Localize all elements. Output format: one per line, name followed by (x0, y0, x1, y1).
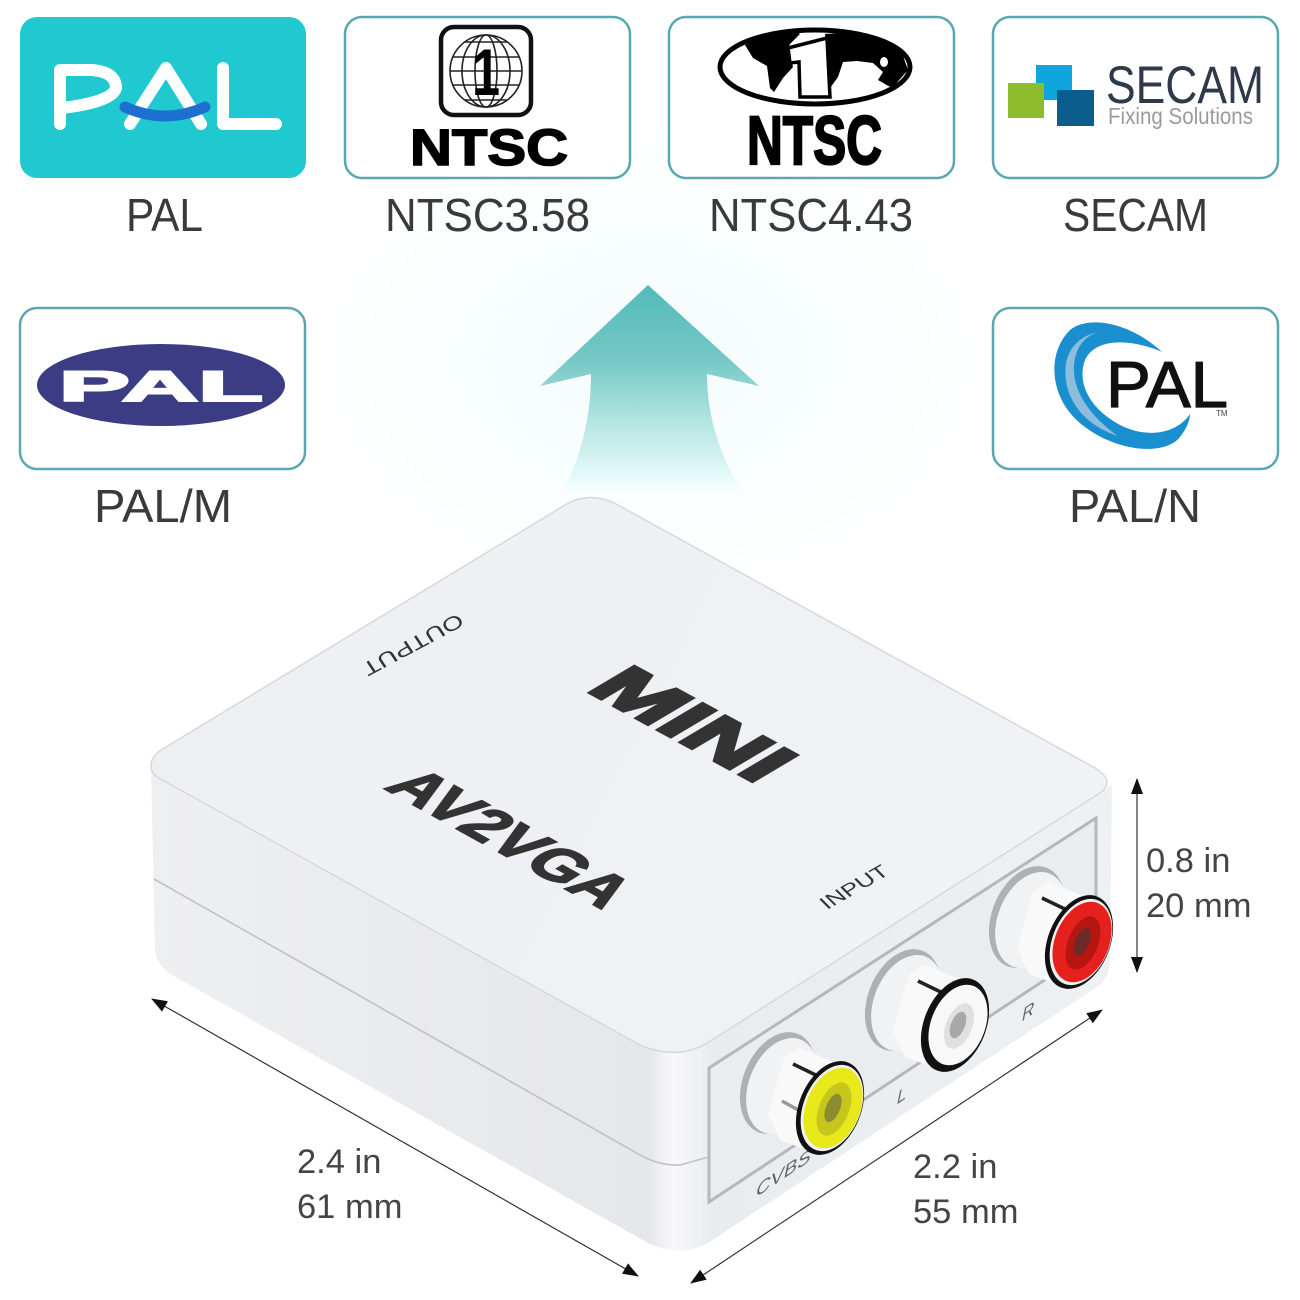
panel: PAL/M (20, 308, 305, 469)
text: NTSC condensed logo: NTSC (747, 102, 882, 179)
dimension text: length: 2.4 in (297, 1143, 381, 1181)
background glow (320, 130, 980, 590)
dimension arrow: width (691, 1010, 1102, 1283)
dimension text: width: 2.2 in (913, 1148, 997, 1186)
label: PAL/N: PAL/N (1069, 480, 1201, 532)
icon: PAL logo (60, 68, 276, 124)
panel: PAL (20, 17, 306, 178)
dimension text: height: 20 mm (1146, 887, 1251, 925)
label: PAL: PAL (126, 189, 203, 241)
text: CVBS: CVBS (754, 1144, 813, 1203)
panel: PAL/N (993, 308, 1278, 469)
dimension text: width (913, 1148, 1018, 1231)
panel: NTSC4.43 (669, 17, 954, 179)
text: Fixing Solutions: Fixing Solutions (1108, 103, 1253, 129)
icon: world ellipse with number 1 (720, 29, 910, 104)
icon: PAL swoosh logo (1054, 322, 1228, 449)
connector: white L (851, 938, 1002, 1082)
label: NTSC3.58: NTSC3.58 (385, 189, 590, 241)
icon: PAL oval logo (37, 344, 285, 426)
panel: NTSC3.58 (345, 17, 630, 178)
icon: globe with number 1 (441, 27, 531, 115)
label: NTSC4.43: NTSC4.43 (709, 189, 913, 241)
label: PAL/M: PAL/M (94, 480, 232, 532)
text: INPUT: INPUT (815, 862, 894, 914)
text: L: L (895, 1082, 909, 1110)
text: MINI: MINI (571, 655, 816, 792)
dimension text: height (1146, 842, 1251, 925)
panel: SECAM (993, 17, 1278, 178)
text: SECAM logo: SECAM (1106, 56, 1264, 115)
text: NTSC logo: NTSC (410, 119, 568, 176)
seam line (154, 879, 709, 1165)
device top face (151, 498, 1107, 1052)
label: SECAM: SECAM (1063, 189, 1208, 241)
dimension text: width: 55 mm (913, 1193, 1018, 1231)
icon: globe with number 1: 1 (472, 35, 500, 109)
connector: red R (975, 855, 1126, 999)
dimension text: length (297, 1143, 402, 1226)
dimension arrow: height (1136, 779, 1138, 972)
icon: PAL oval logo: PAL (59, 363, 263, 411)
device: AV2VGA converter box (151, 498, 1126, 1250)
port panel (709, 818, 1096, 1202)
icon: PAL swoosh logo: PAL (1106, 348, 1228, 421)
icon: SECAM squares (1008, 65, 1094, 126)
device side walls (151, 765, 1112, 1250)
text: R: R (1020, 997, 1036, 1027)
icon: PAL swoosh logo: TM (1216, 409, 1228, 418)
connector: yellow CVBS (726, 1021, 877, 1165)
arrow: upward conversion (540, 285, 759, 497)
text: AV2VGA: AV2VGA (372, 759, 649, 917)
dimension arrow: length (152, 999, 638, 1276)
dimension text: height: 0.8 in (1146, 842, 1230, 880)
dimension text: length: 61 mm (297, 1188, 402, 1226)
text: OUTPUT: OUTPUT (358, 609, 467, 679)
